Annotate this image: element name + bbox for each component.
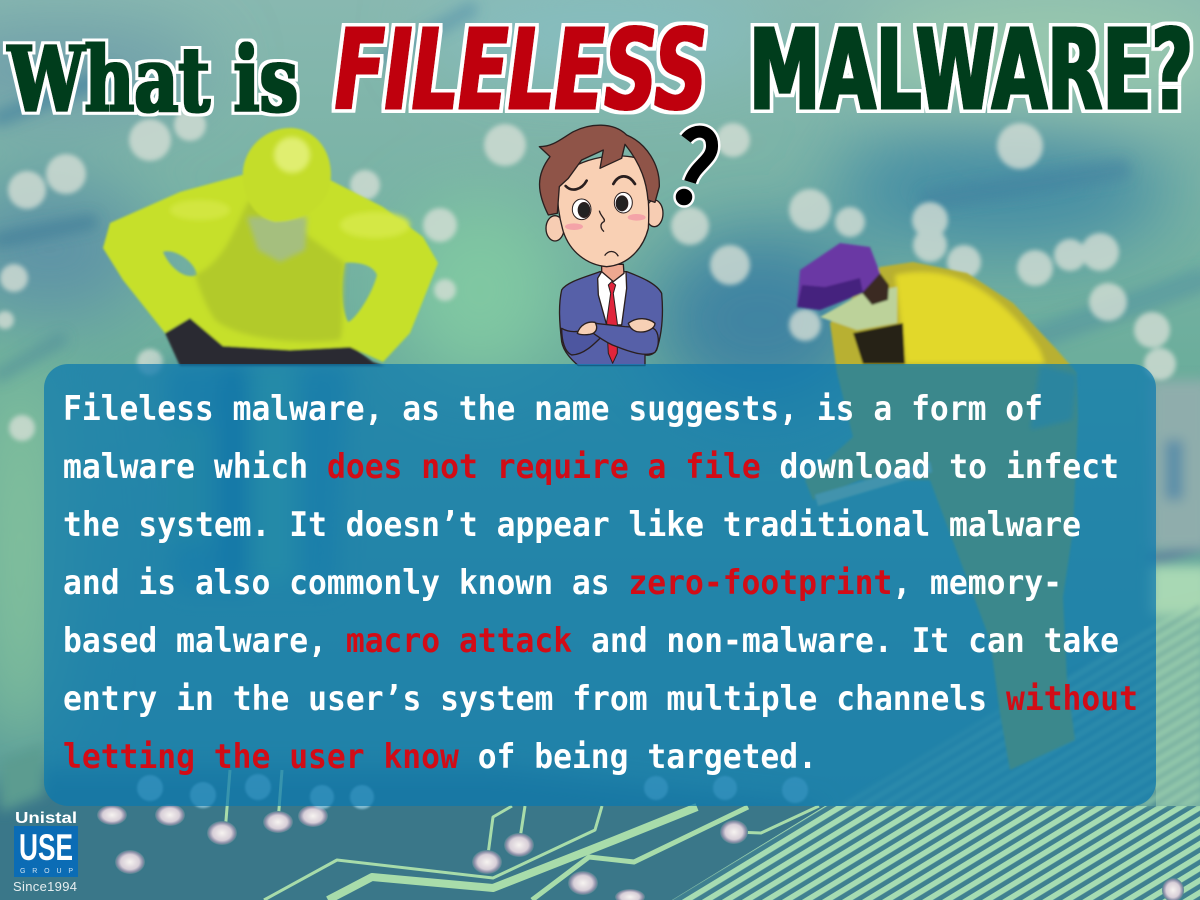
definition text: letting the user know of being targeted. [63, 737, 817, 777]
definition text: the system. It doesn’t appear like traditional malware [63, 505, 1081, 545]
definition text: Fileless malware, as the name suggests, is a form of [63, 389, 1043, 429]
ears [546, 200, 663, 241]
neck [602, 264, 624, 282]
character: confused businessman [539, 125, 663, 366]
title: FILELESS: FILELESS [335, 6, 707, 136]
title [7, 6, 1193, 136]
crossed arms [562, 319, 658, 355]
dark lower board and traces [0, 590, 1200, 900]
logo: Unistal USE Group: USE [19, 827, 73, 868]
logo: Unistal USE Group: Since1994 [13, 879, 77, 894]
legs of the left figure, seen through the panel [165, 364, 350, 590]
definition text: based malware, macro attack and non-malware. It can take [63, 621, 1119, 661]
definition text: malware which does not require a file download to infect [63, 447, 1119, 487]
icon: question mark [674, 132, 712, 206]
blush, nose, mouth [565, 211, 646, 256]
panel: definition [44, 364, 1156, 806]
right margin board tone [1150, 380, 1200, 615]
logo: Unistal USE Group: Unistal [15, 810, 77, 827]
figure: left yellow worker [103, 128, 438, 366]
definition text: and is also commonly known as zero-footprint, memory- [63, 563, 1062, 603]
title: What is: What is [7, 27, 298, 133]
hair [539, 125, 659, 215]
bokeh solder pads [0, 109, 1176, 441]
definition text: entry in the user’s system from multiple channels without [63, 679, 1138, 719]
logo: Unistal USE Group: GROUP [20, 868, 73, 875]
definition text [63, 389, 1138, 777]
shirt and tie [598, 272, 627, 363]
face [557, 156, 649, 267]
figure: right worker with purple cap [797, 243, 1078, 770]
jacket [560, 272, 662, 366]
eyes and brows [566, 176, 635, 220]
logo: Unistal USE Group [13, 810, 78, 894]
